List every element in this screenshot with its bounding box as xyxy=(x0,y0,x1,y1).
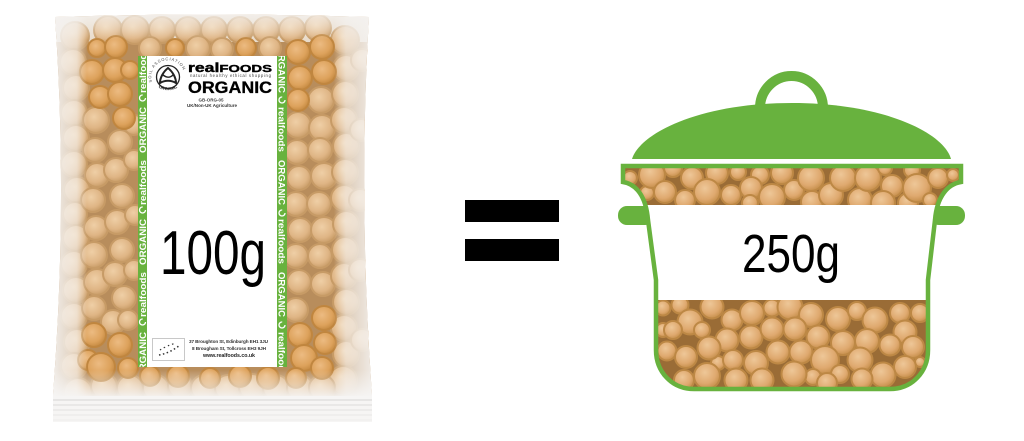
left green strip xyxy=(138,56,147,367)
bottom seal xyxy=(53,396,373,423)
website: www.realfoods.co.uk xyxy=(202,353,255,359)
icon: soil association badge: SOIL ASSOCIATION xyxy=(148,58,186,82)
cooking pot xyxy=(618,76,965,393)
pot lid xyxy=(632,103,951,159)
left green strip: realfoods xyxy=(138,272,149,317)
bag of chickpeas xyxy=(53,14,372,422)
right green strip xyxy=(277,56,287,367)
left green strip: realfoods xyxy=(138,160,149,205)
left green strip: ORGANIC xyxy=(138,107,149,153)
brand name: real FOODS xyxy=(188,61,272,75)
weight: 100g: 100g xyxy=(160,219,266,288)
icon: soil association badge: ORGANIC xyxy=(158,86,178,90)
translucent bag edges xyxy=(53,16,86,396)
label background xyxy=(147,56,277,367)
organic heading: ORGANIC xyxy=(188,79,272,97)
weight: 250g: 250g xyxy=(742,224,840,284)
chickpeas inside the bag xyxy=(53,12,374,424)
left pot handle xyxy=(618,206,654,225)
right green strip: ORGANIC xyxy=(276,160,286,205)
right pot handle xyxy=(930,206,965,225)
right green strip: ORGANIC xyxy=(276,47,286,93)
product label xyxy=(138,56,287,367)
icon: EU organic leaf xyxy=(152,338,184,360)
right green strip: ORGANIC xyxy=(276,272,286,317)
right green strip: realfoods xyxy=(276,332,286,377)
chickpeas: lower band xyxy=(658,300,926,387)
left green strip: ORGANIC xyxy=(138,219,149,265)
equals sign xyxy=(465,200,559,261)
right green strip: realfoods xyxy=(276,107,286,152)
origin note: UK/Non-UK Agriculture xyxy=(187,103,237,108)
left green strip: ORGANIC xyxy=(138,332,149,378)
pot lid handle xyxy=(760,76,823,108)
pot contents xyxy=(620,159,965,393)
chickpeas: upper band xyxy=(625,168,959,205)
right green strip: realfoods xyxy=(276,219,286,264)
bag body xyxy=(53,14,372,422)
certification code: GB-ORG-05 xyxy=(198,98,224,102)
address line 1: 37 Broughton St, Edinburgh EH1 3JU xyxy=(189,339,269,344)
left green strip: realfoods xyxy=(138,48,149,93)
brand tagline: natural healthy ethical shopping xyxy=(190,73,272,78)
pot outline xyxy=(623,166,961,389)
address line 2: 8 Brougham St, Tollcross EH3 9JH xyxy=(192,346,267,351)
